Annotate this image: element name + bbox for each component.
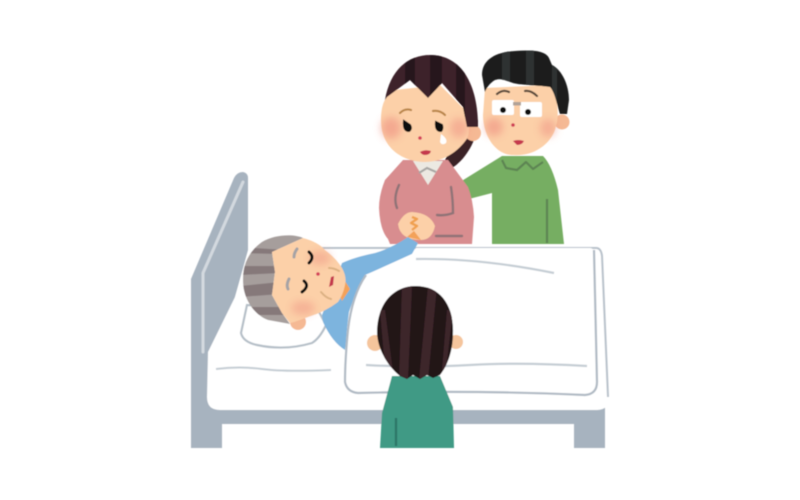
child hair	[377, 286, 453, 379]
man ear	[554, 114, 570, 130]
man face	[483, 85, 558, 155]
child body: teal sweater	[380, 376, 454, 448]
hospital bed	[191, 172, 609, 448]
patient wrinkles	[321, 268, 339, 299]
blanket	[345, 248, 597, 395]
patient	[240, 235, 418, 350]
woman hair	[385, 50, 478, 130]
patient hair	[240, 235, 303, 324]
patient eyes	[302, 252, 312, 292]
woman face	[381, 85, 469, 162]
woman ear	[465, 125, 481, 141]
mattress	[207, 248, 609, 410]
patient eyebrows	[287, 249, 297, 289]
patient body: blue gown	[322, 237, 418, 350]
man	[460, 48, 570, 244]
patient mouth	[329, 276, 334, 287]
sheet crease	[216, 368, 331, 371]
man body: green sweater	[460, 156, 564, 244]
illustration: family at hospital bedside	[190, 50, 610, 449]
man glasses	[492, 100, 542, 117]
patient nose	[316, 272, 320, 276]
bed headboard	[191, 172, 248, 448]
bed frame and legs	[191, 400, 605, 448]
patient hand sleeve cuff	[338, 281, 350, 301]
patient face	[272, 238, 346, 323]
woman body: pink sweater	[379, 160, 474, 244]
woman eyebrows	[400, 109, 445, 115]
woman nose	[418, 136, 422, 140]
woman ponytail	[445, 120, 478, 168]
woman eyes	[404, 121, 442, 131]
child seen from behind	[367, 286, 463, 448]
child ears	[367, 335, 383, 351]
woman collar	[413, 161, 443, 185]
woman	[379, 50, 481, 244]
man eyebrows	[497, 91, 537, 96]
pillow	[241, 305, 326, 348]
woman tear	[440, 134, 446, 144]
patient ear	[290, 314, 306, 330]
man nose and mouth	[511, 123, 515, 127]
woman hands	[398, 212, 435, 240]
man hair	[482, 48, 569, 114]
blanket crease	[366, 364, 587, 366]
woman mouth	[420, 150, 431, 155]
